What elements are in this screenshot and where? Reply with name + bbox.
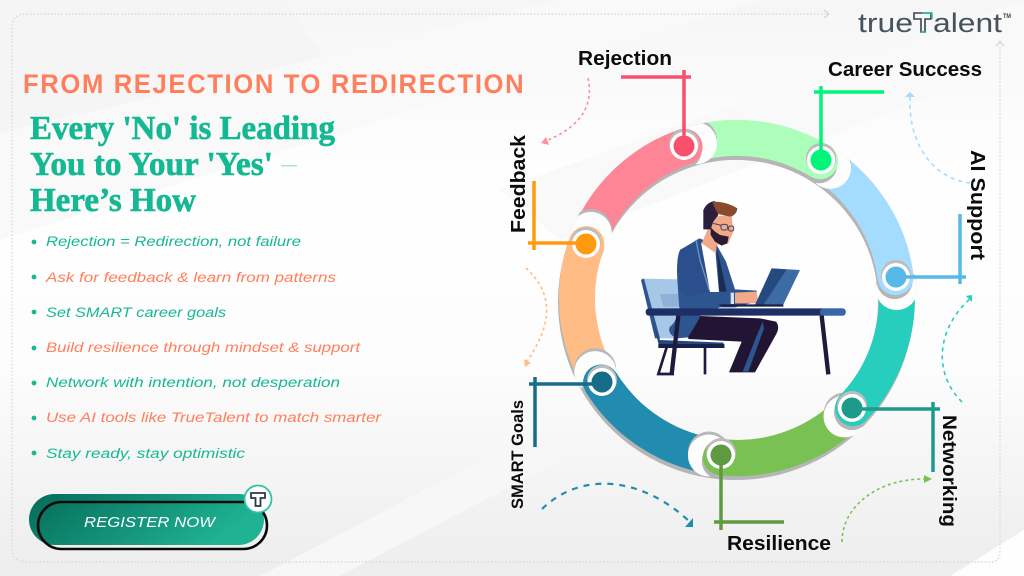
bullet list: Stay ready, stay optimistic — [46, 446, 245, 461]
bullet list: Set SMART career goals — [46, 305, 226, 320]
node: AI Support — [881, 214, 966, 291]
arrow: rejection to feedback — [541, 78, 589, 145]
logo: trueTalent — [858, 8, 1011, 38]
label: Rejection: Rejection — [578, 48, 672, 70]
subtitle: from rejection to redirection: FROM REJECTION TO REDIRECTION — [23, 68, 524, 99]
bullet list — [32, 234, 382, 461]
node: Feedback — [528, 181, 601, 258]
headline: Every 'No' is Leading — [30, 110, 335, 147]
label: SMART Goals: SMART Goals — [509, 400, 527, 509]
label: Networking: Networking — [938, 415, 959, 527]
arrow: AI support to career success — [905, 92, 970, 183]
label: Resilience: Resilience — [727, 533, 831, 555]
bullet list: Rejection = Redirection, not failure — [46, 234, 301, 249]
bullet list: Build resilience through mindset & support — [46, 340, 362, 355]
headline: You to Your 'Yes' — [30, 146, 273, 183]
node: SMART Goals — [529, 365, 617, 447]
logo: trueTalent: alent — [933, 8, 1003, 38]
label: AI Support: AI Support — [966, 150, 988, 260]
label: Career Success: Career Success — [828, 59, 982, 81]
logo: trueTalent: TM — [1003, 14, 1011, 20]
headline — [30, 110, 335, 219]
arrow: feedback to smart goals — [524, 268, 547, 367]
arrow: resilience to networking — [842, 475, 932, 542]
illustration: man at laptop — [641, 201, 846, 374]
button: register now — [29, 486, 272, 549]
logo: trueTalent: true — [858, 8, 913, 38]
bullet list: Use AI tools like TrueTalent to match smarter — [46, 410, 382, 425]
arrow: smart goals to resilience — [542, 484, 693, 527]
button: register now: REGISTER NOW — [84, 514, 217, 531]
headline: Here’s How — [30, 182, 197, 219]
bullet list: Ask for feedback & learn from patterns — [45, 270, 336, 285]
icon: T badge — [244, 486, 272, 512]
label: Feedback: Feedback — [508, 134, 530, 233]
cycle ring — [567, 119, 918, 479]
node: Career Success — [806, 86, 884, 174]
bullet list: Network with intention, not desperation — [46, 375, 340, 390]
node: Resilience — [706, 438, 784, 530]
node: Rejection — [621, 70, 699, 160]
node: Networking — [837, 391, 940, 472]
arrow: networking to AI support — [942, 295, 972, 402]
